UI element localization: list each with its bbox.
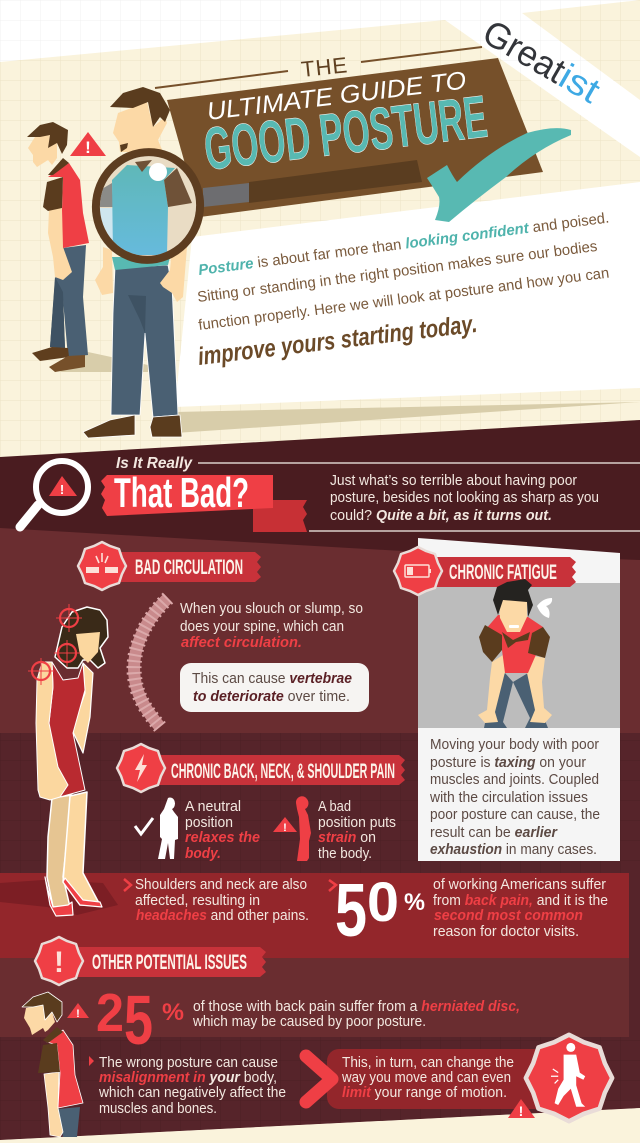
neutral copy: body. bbox=[185, 845, 221, 862]
hair bbox=[55, 607, 108, 668]
small man with poor posture bbox=[27, 122, 148, 372]
intro copy bbox=[330, 472, 599, 524]
stat copy bbox=[192, 998, 520, 1030]
stat copy bbox=[433, 876, 608, 940]
callout: vertebrae bbox=[180, 663, 369, 712]
logo: Greatist bbox=[476, 11, 607, 111]
copy: does your spine, which can bbox=[180, 618, 344, 635]
stat: 50 percent: % bbox=[404, 889, 425, 916]
panel copy: poor posture can cause, the bbox=[430, 806, 600, 823]
callout: range of motion: This, in turn, can change the bbox=[342, 1054, 514, 1071]
icon badge: blocked flow bbox=[78, 542, 126, 590]
logo: Greatist: Great bbox=[476, 11, 573, 91]
magnifying glass bbox=[92, 148, 204, 264]
ribbon heading bbox=[115, 552, 261, 582]
shoes bbox=[45, 877, 73, 916]
bad copy: the body. bbox=[318, 845, 372, 862]
bad copy: position puts bbox=[318, 814, 396, 831]
shoulders copy: Shoulders and neck are also bbox=[135, 876, 307, 893]
stat: 25 percent bbox=[96, 981, 184, 1059]
ribbon heading: CHRONIC BACK, NECK, & SHOULDER PAIN bbox=[171, 760, 395, 783]
icon badge: lightning bbox=[117, 744, 165, 792]
title: the: THE bbox=[300, 52, 348, 82]
intro text: Sitting or standing in the right position makes sure our bodies bbox=[196, 238, 598, 306]
magnifier handle bbox=[203, 160, 422, 207]
icon: warning: ! bbox=[76, 1008, 80, 1020]
panel copy: posture is taxing on your bbox=[430, 754, 586, 771]
stat copy: which may be caused by poor posture. bbox=[192, 1013, 426, 1030]
stat copy: second most common bbox=[434, 907, 583, 924]
icon: warning: ! bbox=[519, 1103, 523, 1119]
panel: chronic fatigue bbox=[394, 538, 620, 861]
arrow bbox=[124, 879, 131, 891]
intro text: function properly. Here we will look at posture and how you can bbox=[197, 265, 610, 334]
stat: 25 percent: % bbox=[162, 999, 184, 1026]
section header: is it really that bad bbox=[20, 455, 640, 532]
right arm bbox=[72, 663, 93, 753]
intro text: improve yours starting today. bbox=[196, 310, 479, 371]
intro copy: Just what’s so terrible about having poor bbox=[330, 472, 577, 489]
target markers bbox=[28, 604, 82, 685]
intro copy: posture, besides not looking as sharp as you bbox=[330, 489, 599, 506]
intro text bbox=[196, 210, 610, 371]
misalignment copy: misalignment in your body, bbox=[99, 1069, 277, 1086]
copy: affect circulation. bbox=[181, 634, 302, 651]
copy: When you slouch or slump, so bbox=[180, 600, 363, 617]
icon: warning bbox=[273, 817, 297, 834]
magnifier icon: ! bbox=[60, 482, 64, 497]
icon badge: battery bbox=[394, 547, 442, 595]
stat copy: of working Americans suffer bbox=[433, 876, 606, 893]
stat: 25 percent: 2 bbox=[96, 983, 124, 1043]
stat: 50 percent: 0 bbox=[367, 870, 399, 933]
icon badge: exclamation bbox=[35, 937, 83, 985]
stat copy: of those with back pain suffer from a herniated disc, bbox=[193, 998, 520, 1015]
ribbon heading bbox=[72, 947, 266, 977]
icon badge: exclamation: ! bbox=[54, 946, 64, 979]
panel copy bbox=[429, 736, 600, 858]
illustration: woman with poor posture bbox=[0, 604, 118, 916]
section: chronic back, neck and shoulder pain bbox=[117, 744, 405, 862]
illustration: man slouching bbox=[22, 992, 83, 1137]
dress bbox=[38, 662, 85, 797]
misalignment copy: which can negatively affect the bbox=[98, 1084, 286, 1101]
misalignment copy: The wrong posture can cause bbox=[99, 1054, 278, 1071]
title banner bbox=[155, 47, 543, 217]
arrow bbox=[329, 880, 336, 891]
background: maroon sections bbox=[0, 420, 640, 1143]
misalignment copy bbox=[98, 1054, 286, 1117]
callout: vertebrae: to deteriorate over time. bbox=[193, 688, 350, 705]
kicker: Is It Really bbox=[116, 455, 193, 472]
section: bad circulation bbox=[78, 542, 369, 727]
neutral copy bbox=[185, 798, 260, 862]
white intro panel bbox=[175, 182, 640, 433]
callout: range of motion bbox=[327, 1049, 552, 1109]
illustration: spine bbox=[134, 598, 168, 727]
ribbon heading: CHRONIC FATIGUE bbox=[449, 561, 557, 584]
intro copy: could? Quite a bit, as it turns out. bbox=[330, 507, 552, 524]
logo: Greatist: ist bbox=[552, 55, 607, 111]
stat copy: from back pain, and it is the bbox=[433, 892, 608, 909]
stat copy: reason for doctor visits. bbox=[433, 923, 579, 940]
ribbon heading bbox=[155, 755, 405, 785]
shoulders copy bbox=[135, 876, 309, 924]
intro text: Posture is about far more than looking confident and poised. bbox=[197, 210, 610, 279]
misalignment copy: muscles and bones. bbox=[99, 1100, 217, 1117]
stat: 50 percent: 5 bbox=[335, 868, 367, 952]
warning triangle bbox=[70, 132, 106, 157]
bad copy: strain on bbox=[318, 829, 376, 846]
warning triangle: ! bbox=[85, 138, 91, 157]
large man with good posture bbox=[83, 87, 280, 438]
legs bbox=[47, 795, 72, 907]
neutral copy: relaxes the bbox=[185, 829, 260, 846]
shoulders copy: headaches and other pains. bbox=[136, 907, 309, 924]
panel copy: with the circulation issues bbox=[429, 789, 588, 806]
icon badge: walking figure bbox=[526, 1035, 612, 1121]
panel copy: muscles and joints. Coupled bbox=[430, 771, 599, 788]
left arm bbox=[36, 662, 68, 800]
title: ultimate guide to: ULTIMATE GUIDE TO bbox=[205, 66, 468, 126]
shoulders copy: affected, resulting in bbox=[135, 892, 260, 909]
bad copy: A bad bbox=[318, 798, 351, 815]
icon: warning bbox=[67, 1003, 89, 1020]
callout: vertebrae: This can cause vertebrae bbox=[192, 670, 352, 687]
stat: 50 percent bbox=[335, 868, 425, 952]
ribbon heading: OTHER POTENTIAL ISSUES bbox=[92, 951, 247, 974]
callout: range of motion: limit your range of motion. bbox=[342, 1084, 507, 1101]
panel copy: exhaustion in many cases. bbox=[430, 841, 597, 858]
illustration: tired man bbox=[478, 579, 552, 728]
stat band: shoulders and 50 percent bbox=[124, 868, 608, 952]
ribbon heading: That Bad? bbox=[114, 469, 249, 516]
checkmark bbox=[427, 128, 571, 222]
neutral copy: A neutral bbox=[185, 798, 241, 815]
bad copy bbox=[318, 798, 396, 862]
arrow bbox=[89, 1056, 94, 1066]
magnifier icon bbox=[20, 461, 88, 527]
ribbon heading: BAD CIRCULATION bbox=[135, 556, 243, 579]
panel copy: result can be earlier bbox=[430, 824, 558, 841]
callout: range of motion: way you move and can even bbox=[341, 1069, 511, 1086]
stat: 25 percent: 5 bbox=[124, 981, 153, 1059]
section: other potential issues bbox=[22, 937, 612, 1137]
figure: bad bbox=[296, 796, 311, 861]
icon: check bbox=[135, 818, 153, 834]
large chevron bbox=[306, 1056, 332, 1102]
panel copy: Moving your body with poor bbox=[430, 736, 599, 753]
figure: neutral bbox=[158, 797, 178, 859]
neutral copy: position bbox=[185, 814, 233, 831]
ribbon heading bbox=[101, 469, 307, 532]
icon: warning bbox=[508, 1099, 535, 1119]
ribbon heading bbox=[430, 557, 576, 587]
copy bbox=[180, 600, 363, 651]
icon: warning: ! bbox=[283, 822, 287, 834]
